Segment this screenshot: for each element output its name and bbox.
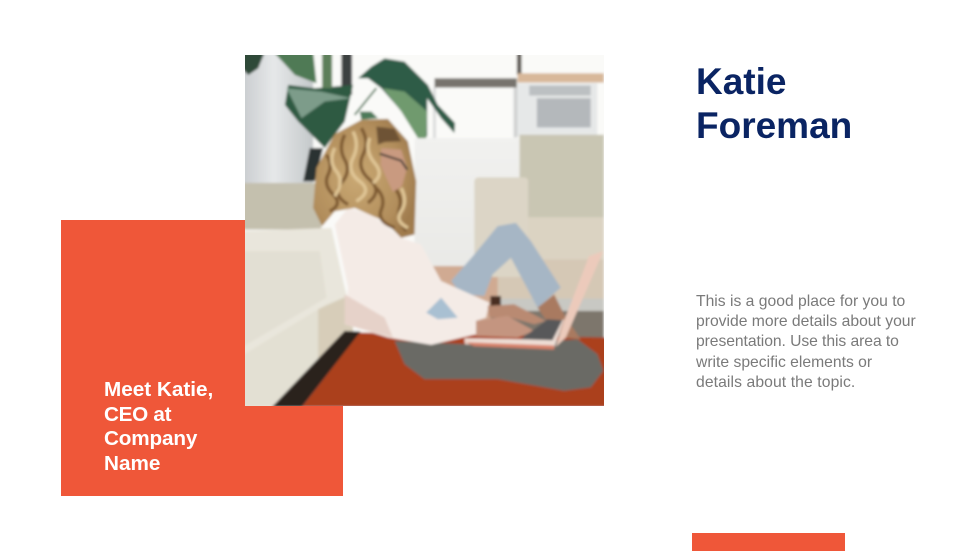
heading: Katie Foreman: Foreman xyxy=(696,105,852,146)
accent: orange bar at bottom xyxy=(692,533,845,551)
caption: Meet Katie, CEO at Company Name: Company xyxy=(104,427,197,450)
glasses xyxy=(380,154,407,170)
body text xyxy=(696,293,916,391)
shirt xyxy=(335,208,489,345)
panel: orange caption block xyxy=(61,220,343,496)
body text: write specific elements or xyxy=(696,354,872,371)
window xyxy=(434,78,517,88)
body text: provide more details about your xyxy=(696,313,916,330)
body text: This is a good place for you to xyxy=(696,293,905,310)
plant leaves xyxy=(242,52,265,75)
face xyxy=(381,148,407,192)
right sofa xyxy=(520,135,604,219)
caption: Meet Katie, CEO at Company Name: CEO at xyxy=(104,402,171,426)
curtain xyxy=(242,52,313,185)
heading: Katie Foreman: Katie xyxy=(696,61,786,102)
heading: Katie Foreman xyxy=(696,61,852,146)
floor xyxy=(424,266,504,343)
caption: Meet Katie, CEO at Company Name xyxy=(104,378,213,474)
hair xyxy=(313,119,416,238)
hair curls xyxy=(326,128,406,231)
caption: Meet Katie, CEO at Company Name: Name xyxy=(104,452,160,474)
caption: Meet Katie, CEO at Company Name: Meet Katie, xyxy=(104,378,213,401)
hair crown xyxy=(376,126,401,145)
ankle xyxy=(538,294,581,339)
body text: details about the topic. xyxy=(696,374,855,391)
laptop xyxy=(556,251,603,347)
left sofa xyxy=(242,183,321,230)
photo: woman working on a laptop xyxy=(245,55,604,406)
body text: presentation. Use this area to xyxy=(696,333,899,350)
rug xyxy=(302,333,607,407)
hands xyxy=(488,304,546,324)
jeans xyxy=(451,223,561,308)
pants xyxy=(395,339,603,391)
